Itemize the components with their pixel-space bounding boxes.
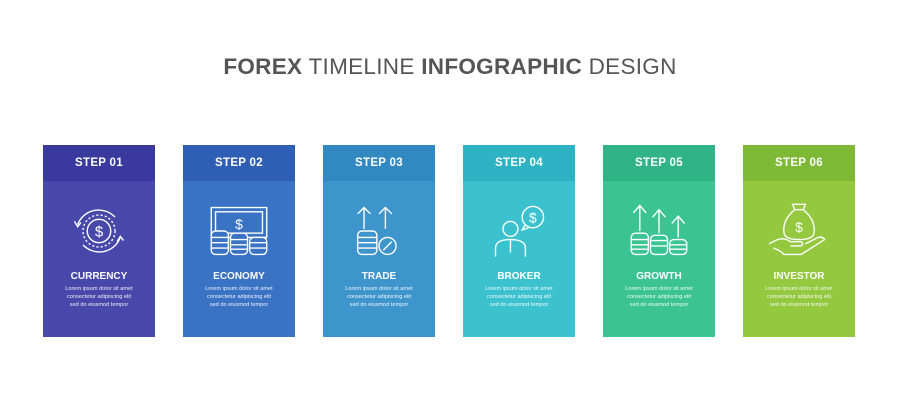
step header 02: STEP 02 bbox=[215, 157, 263, 169]
name: TRADE bbox=[362, 271, 396, 282]
icon: currency exchange bbox=[74, 209, 124, 253]
panel: step 01 currency bbox=[43, 145, 155, 337]
description: sed do eiusmod tempor bbox=[350, 302, 408, 308]
description: sed do eiusmod tempor bbox=[490, 302, 548, 308]
icon: money bag in hand: $ bbox=[795, 219, 803, 235]
description: Lorem ipsum dolor sit amet bbox=[205, 286, 273, 292]
name: CURRENCY bbox=[71, 271, 127, 282]
description: sed do eiusmod tempor bbox=[210, 302, 268, 308]
description: Lorem ipsum dolor sit amet bbox=[65, 286, 133, 292]
name: ECONOMY bbox=[213, 271, 265, 282]
icon: broker person: $ bbox=[529, 209, 537, 225]
step header 04 bbox=[463, 145, 575, 181]
panel: step 04 broker bbox=[463, 145, 575, 337]
description: consectetur adipiscing elit bbox=[767, 294, 831, 300]
icon: currency exchange: $ bbox=[95, 223, 104, 240]
description: consectetur adipiscing elit bbox=[347, 294, 411, 300]
description bbox=[205, 286, 273, 308]
step header 03: STEP 03 bbox=[355, 157, 403, 169]
name: GROWTH bbox=[636, 271, 682, 282]
description: consectetur adipiscing elit bbox=[627, 294, 691, 300]
step header 03 bbox=[323, 145, 435, 181]
description bbox=[345, 286, 413, 308]
description: consectetur adipiscing elit bbox=[207, 294, 271, 300]
name: INVESTOR bbox=[774, 271, 824, 282]
description: Lorem ipsum dolor sit amet bbox=[625, 286, 693, 292]
step header 01: STEP 01 bbox=[75, 157, 123, 169]
description: Lorem ipsum dolor sit amet bbox=[485, 286, 553, 292]
description bbox=[65, 286, 133, 308]
description: consectetur adipiscing elit bbox=[487, 294, 551, 300]
step header 06 bbox=[743, 145, 855, 181]
description bbox=[765, 286, 833, 308]
description bbox=[625, 286, 693, 308]
panel: step 05 growth bbox=[603, 145, 715, 337]
icon: banknote and coins bbox=[210, 206, 268, 256]
step header 02 bbox=[183, 145, 295, 181]
icon: banknote and coins: $ bbox=[235, 216, 243, 232]
icon: coins with arrows bbox=[356, 206, 397, 256]
step header 04: STEP 04 bbox=[495, 157, 543, 169]
description: Lorem ipsum dolor sit amet bbox=[345, 286, 413, 292]
step header 05 bbox=[603, 145, 715, 181]
name: BROKER bbox=[497, 271, 541, 282]
step header 01 bbox=[43, 145, 155, 181]
panel: step 02 economy bbox=[183, 145, 295, 337]
panel: step 06 investor bbox=[743, 145, 855, 337]
step header 06: STEP 06 bbox=[775, 157, 823, 169]
description: sed do eiusmod tempor bbox=[770, 302, 828, 308]
panel: step 03 trade bbox=[323, 145, 435, 337]
description bbox=[485, 286, 553, 308]
title: FOREX TIMELINE INFOGRAPHIC DESIGN bbox=[223, 54, 677, 79]
description: Lorem ipsum dolor sit amet bbox=[765, 286, 833, 292]
icon: broker person bbox=[494, 206, 544, 257]
icon: growing coins bbox=[630, 204, 688, 256]
description: consectetur adipiscing elit bbox=[67, 294, 131, 300]
description: sed do eiusmod tempor bbox=[70, 302, 128, 308]
icon: money bag in hand bbox=[768, 204, 826, 256]
step header 05: STEP 05 bbox=[635, 157, 683, 169]
description: sed do eiusmod tempor bbox=[630, 302, 688, 308]
